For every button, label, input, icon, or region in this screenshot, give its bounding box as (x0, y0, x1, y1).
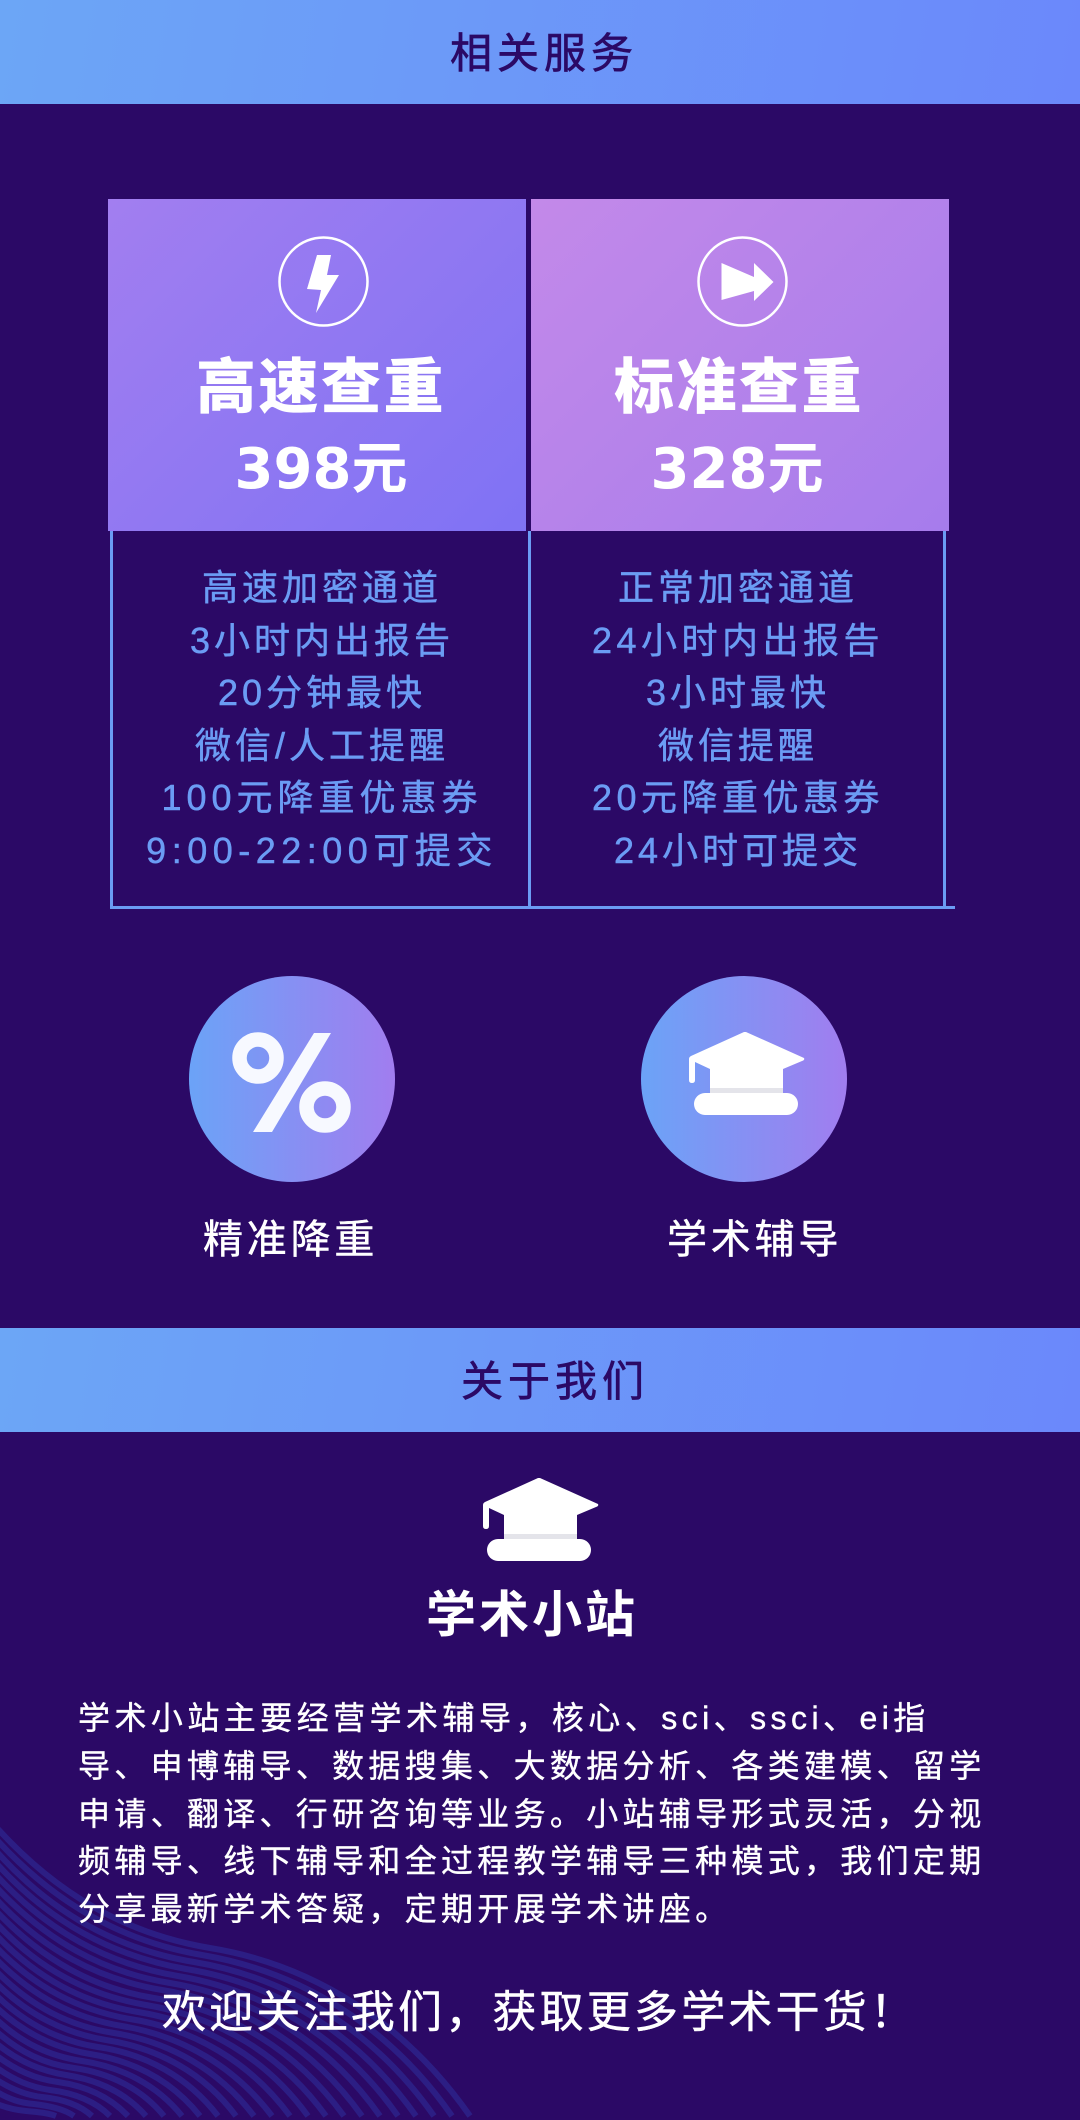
text block: about description: 学术小站主要经营学术辅导，核心、sci、ssci、ei指 (78, 1700, 930, 1736)
text block: about description: 导、申博辅导、数据搜集、大数据分析、各类建模、留学 (78, 1748, 986, 1784)
panel: standard check card (531, 199, 949, 531)
header band: about us (0, 1328, 1080, 1432)
heading: about us: 关于我们 (461, 1358, 649, 1405)
text block: about description: 分享最新学术答疑，定期开展学术讲座。 (78, 1891, 731, 1927)
price: 328 yuan: 328元 (651, 437, 823, 502)
list: standard features: 微信提醒 (658, 725, 818, 766)
list: standard features: 24小时可提交 (614, 830, 862, 871)
list: standard features: 正常加密通道 (618, 567, 858, 608)
icon: graduation cap circle (641, 976, 847, 1182)
list: high-speed features: 微信/人工提醒 (195, 725, 449, 766)
list: standard features (592, 567, 884, 871)
decorative wave pattern (0, 1827, 472, 2119)
text block: about description: 申请、翻译、行研咨询等业务。小站辅导形式灵活，分视 (78, 1796, 986, 1832)
brand title: 学术小站 (426, 1587, 638, 1643)
table frame and feature lists (110, 531, 955, 909)
list: standard features: 20元降重优惠券 (592, 777, 884, 818)
list: high-speed features: 高速加密通道 (202, 567, 442, 608)
icon: fast forward (697, 236, 788, 327)
text block: about description: 频辅导、线下辅导和全过程教学辅导三种模式，我们定期 (78, 1843, 986, 1879)
card title: high-speed check: 高速查重 (196, 354, 446, 421)
list: high-speed features: 3小时内出报告 (190, 620, 454, 661)
price: 398 yuan: 398元 (235, 437, 407, 502)
label: academic tutoring: 学术辅导 (667, 1218, 842, 1262)
icon: logo graduation cap (483, 1478, 598, 1561)
list: standard features: 24小时内出报告 (592, 620, 884, 661)
list: standard features: 3小时最快 (646, 672, 830, 713)
icon: percent circle (189, 976, 395, 1182)
list: high-speed features: 100元降重优惠券 (161, 777, 483, 818)
list: high-speed features (146, 567, 498, 871)
closing call to action: 欢迎关注我们，获取更多学术干货！ (162, 1988, 917, 2037)
list: high-speed features: 9:00-22:00可提交 (146, 830, 498, 871)
heading: related services: 相关服务 (450, 30, 638, 77)
header band: related services (0, 0, 1080, 104)
list: high-speed features: 20分钟最快 (218, 672, 426, 713)
card title: standard check: 标准查重 (614, 354, 864, 421)
label: precise reduction: 精准降重 (203, 1218, 378, 1262)
icon: lightning bolt (278, 236, 369, 327)
panel: high-speed check card (108, 199, 526, 531)
text block: about description (78, 1700, 986, 1927)
